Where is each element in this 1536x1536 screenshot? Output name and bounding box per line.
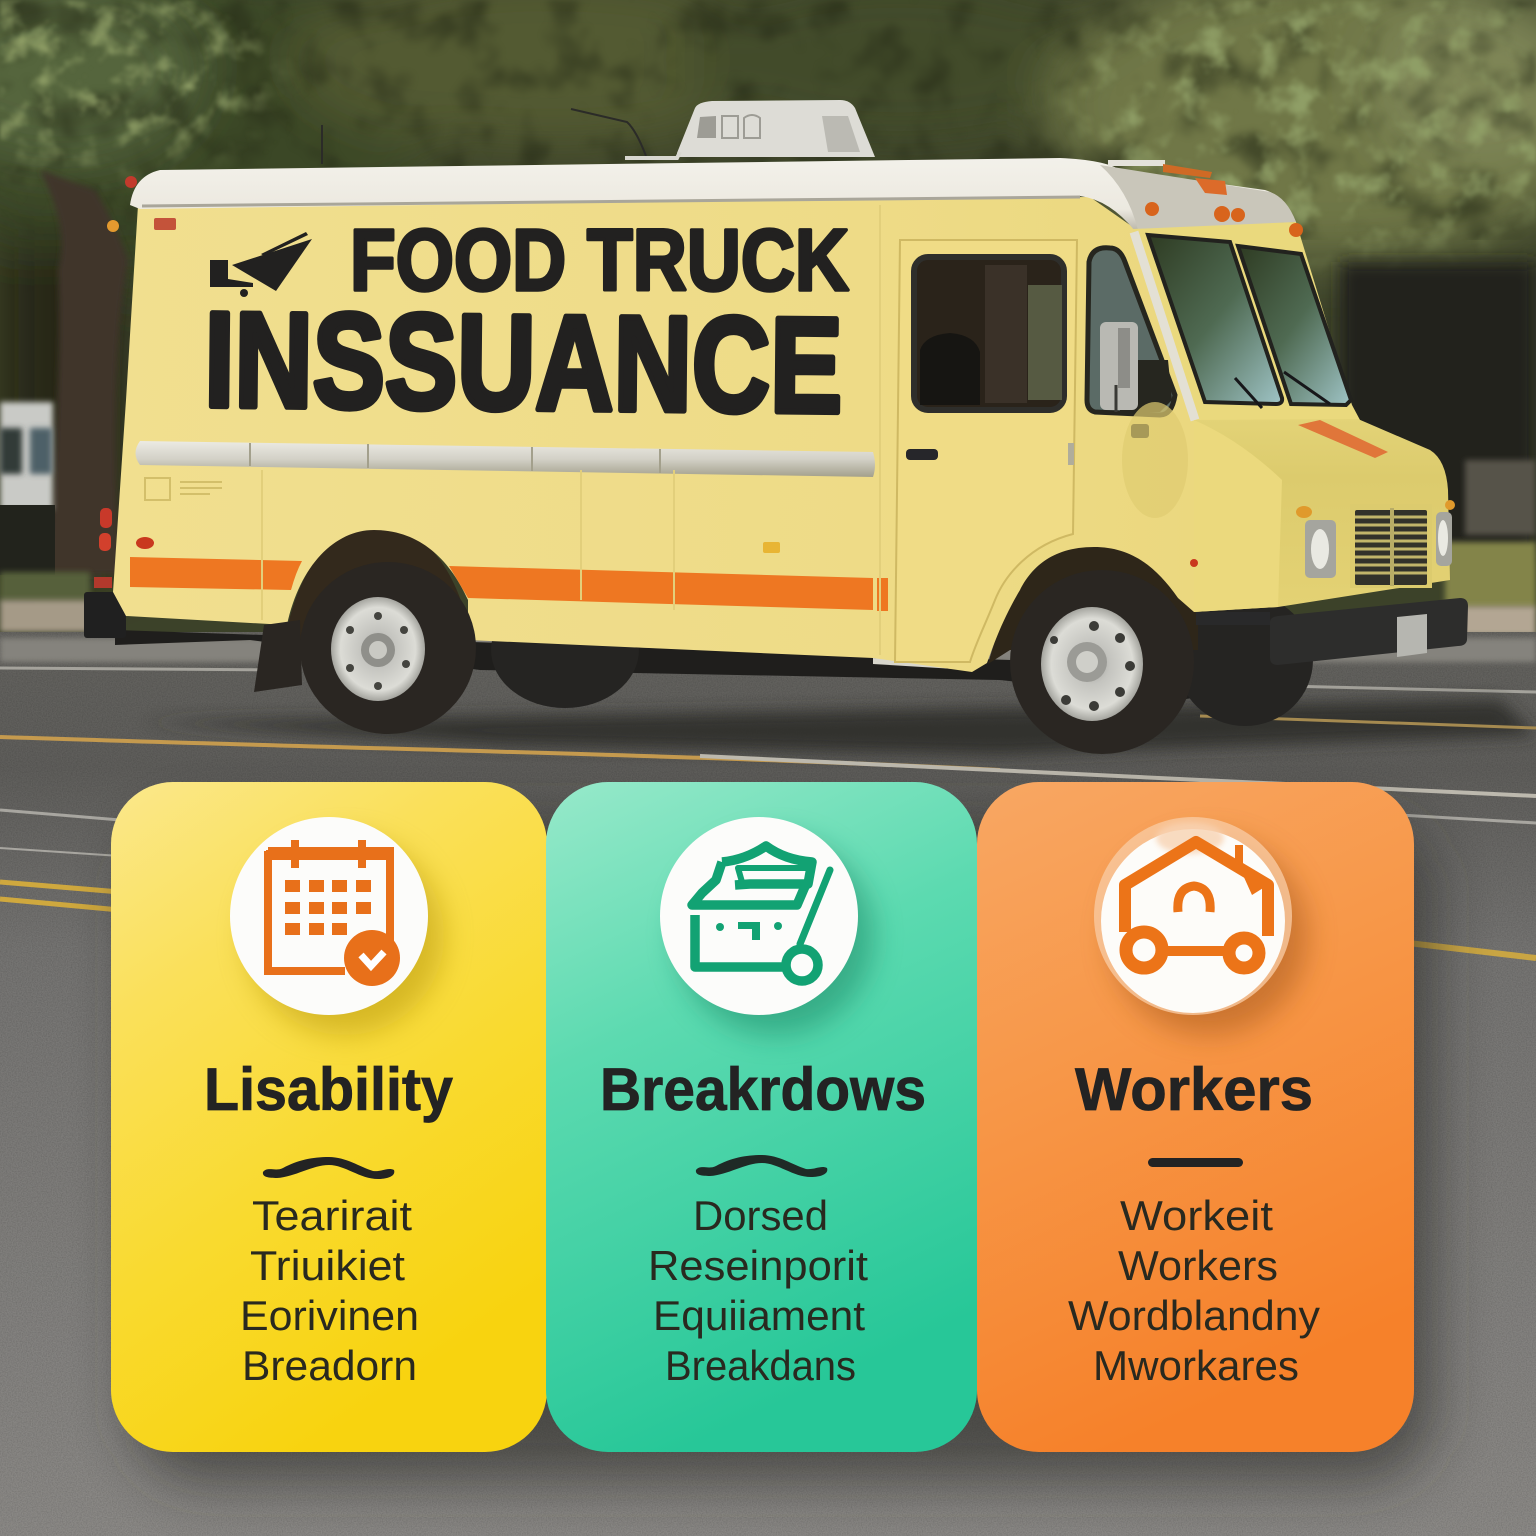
panel: breakdowns [546, 782, 977, 1452]
sill under door [873, 658, 972, 670]
list text [648, 1192, 868, 1389]
headlights [1305, 512, 1452, 578]
box body [113, 197, 1194, 672]
truck title: food truck: FOOD TRUCK [350, 212, 849, 309]
list text: Dorsed [693, 1192, 828, 1239]
far-side wheels, chassis and wheel wells [115, 525, 1313, 726]
list text: Workers [1118, 1242, 1278, 1289]
list text: Tearirait [252, 1192, 412, 1239]
side cab window [1087, 248, 1175, 415]
background: trees and buildings [0, 0, 1536, 660]
orange side stripe [130, 557, 888, 611]
food truck [84, 100, 1468, 754]
list text: Mworkares [1093, 1342, 1299, 1389]
small body details [136, 205, 880, 655]
card drop shadows [132, 820, 1432, 1480]
list text [1068, 1192, 1320, 1389]
list text: Eorivinen [240, 1292, 419, 1339]
front grille [1350, 504, 1432, 588]
list text: Equiiament [653, 1292, 865, 1339]
icon: equipment cart [660, 817, 874, 1035]
bar divider [1148, 1158, 1243, 1167]
list text: Breakdans [665, 1342, 856, 1389]
front wheel [1010, 570, 1194, 754]
roof antenna [322, 109, 646, 164]
roof AC unit [625, 100, 875, 158]
rear wheel [300, 562, 476, 734]
side mirror [1100, 322, 1149, 438]
roof cap [130, 158, 1360, 420]
side logo mark [210, 232, 312, 297]
marker lights [1145, 202, 1303, 237]
list text: Workeit [1120, 1192, 1273, 1239]
chrome side rail [136, 441, 875, 477]
list text: Wordblandny [1068, 1292, 1320, 1339]
heading: Breakrdows [600, 1056, 926, 1123]
heading: Workers [1075, 1056, 1313, 1123]
road surface [0, 632, 1536, 1536]
door [895, 240, 1077, 662]
list text: Reseinporit [648, 1242, 868, 1289]
icon: calendar with check [230, 817, 444, 1035]
truck title: issuance: INSSUANCE [204, 284, 843, 441]
heading: Lisability [204, 1056, 454, 1123]
hood and nose [1190, 419, 1455, 612]
list text [240, 1192, 419, 1389]
squiggle divider [263, 1157, 394, 1179]
rear mud flap [254, 620, 302, 692]
rear bumper and tail lights [84, 176, 137, 638]
windshields [1148, 235, 1351, 408]
front bumper [1196, 598, 1468, 665]
list text: Breadorn [242, 1342, 417, 1389]
panel: liability [111, 782, 547, 1452]
panel: workers [977, 782, 1414, 1452]
list text: Triuikiet [250, 1242, 405, 1289]
squiggle divider [696, 1155, 827, 1177]
icon: house on wheels [1094, 817, 1308, 1035]
